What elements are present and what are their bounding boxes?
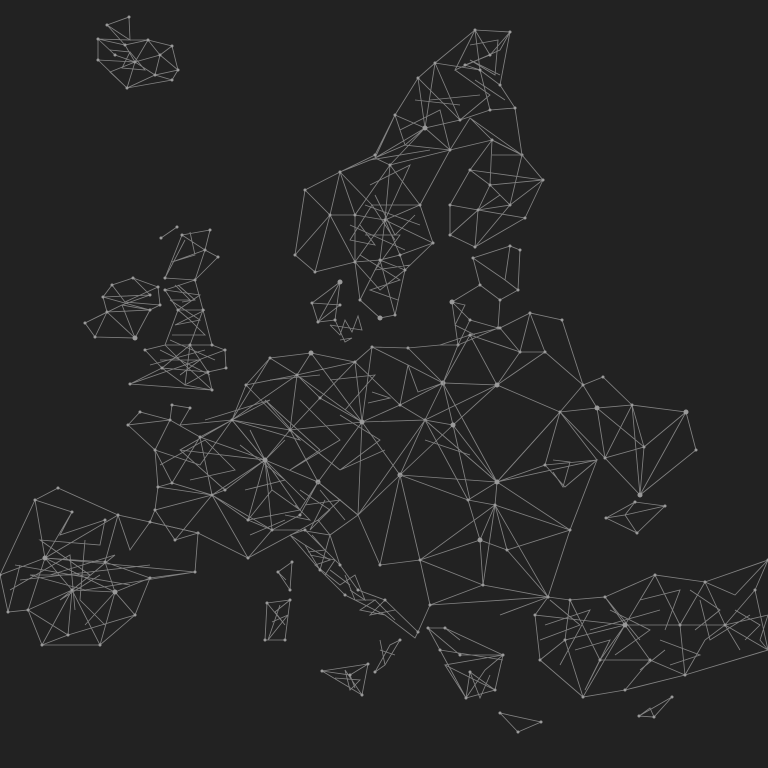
region: Crete — [500, 713, 541, 732]
region: Turkey — [500, 560, 768, 697]
region: Italy — [290, 530, 418, 672]
region: Denmark — [312, 282, 362, 342]
region: Sardinia and Corsica — [265, 562, 292, 640]
region: Norway and Sweden — [295, 30, 522, 318]
region: Ukraine, Belarus, Russia west — [440, 313, 696, 495]
region: Cyprus — [639, 697, 672, 717]
region: Sicily — [322, 664, 368, 695]
region: Poland, Germany, Low Countries — [205, 345, 497, 515]
region: Greece — [428, 628, 503, 698]
region: Ireland — [85, 278, 160, 338]
region: France and Alps — [128, 405, 358, 558]
region: Balkans — [358, 412, 597, 632]
region: Crimea — [606, 502, 665, 533]
region: Iberia — [0, 488, 198, 645]
region: Great Britain — [130, 227, 226, 390]
region: Baltics — [452, 246, 520, 345]
region: Iceland — [98, 17, 178, 88]
region: Finland — [450, 140, 543, 247]
